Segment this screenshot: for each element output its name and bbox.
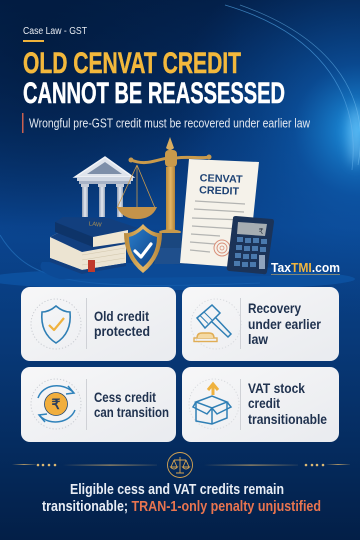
- panel: VAT stock credit transitionable: [182, 367, 339, 442]
- divider with scales emblem: [12, 452, 350, 478]
- icon: shield check: [31, 299, 81, 349]
- icon: shield: [124, 224, 162, 273]
- panel: cess credit can transition: [21, 367, 176, 442]
- icon: calculator: ₹: [258, 227, 264, 236]
- label: Cess credit: [94, 389, 156, 405]
- label: Old credit: [94, 308, 149, 324]
- panel: old credit protected: [21, 287, 176, 361]
- icon: law books: LAW: [88, 221, 102, 229]
- label: protected: [94, 323, 150, 339]
- icon: scales emblem: [168, 452, 192, 478]
- document: CENVAT CREDIT: CREDIT: [199, 184, 240, 198]
- label: can transition: [94, 404, 169, 420]
- icon: rupee cycle: [31, 379, 81, 429]
- label: law: [248, 331, 268, 347]
- icon: calculator: [227, 216, 274, 274]
- subtitle: Wrongful pre-GST credit must be recovered under earlier law: [29, 116, 311, 130]
- closing statement: [42, 482, 321, 515]
- title: [23, 47, 285, 110]
- title: OLD CENVAT CREDIT: [23, 47, 241, 80]
- document: CENVAT CREDIT: CENVAT: [199, 172, 243, 186]
- eyebrow: Case Law - GST: Case Law - GST: [23, 26, 87, 37]
- closing statement: Eligible cess and VAT credits remain: [70, 482, 284, 498]
- icon: courthouse: [75, 157, 133, 217]
- illustration: law and credit: [40, 137, 288, 279]
- document: CENVAT CREDIT: [180, 159, 259, 268]
- icon: open box: [189, 379, 239, 429]
- label: credit: [248, 395, 280, 411]
- label: under earlier: [248, 316, 321, 332]
- icon: gavel: [191, 299, 241, 349]
- label: Recovery: [248, 300, 301, 316]
- icon: scales of justice: [117, 137, 212, 264]
- panel: recovery under earlier law: [182, 287, 339, 361]
- closing statement: transitionable; TRAN-1-only penalty unjustified: [42, 499, 321, 515]
- eyebrow: Case Law - GST: [23, 26, 87, 42]
- icon: law books: [50, 217, 138, 274]
- logo: TaxTMI.com: TaxTMI.com: [271, 260, 340, 275]
- label: transitionable: [248, 411, 327, 427]
- icon: rupee cycle: ₹: [52, 396, 61, 412]
- label: VAT stock: [248, 380, 305, 396]
